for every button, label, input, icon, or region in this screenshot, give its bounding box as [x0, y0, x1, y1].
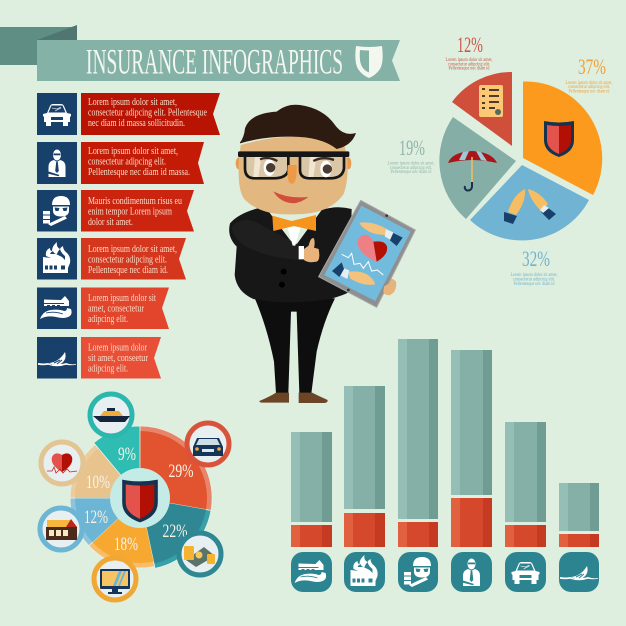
mouth	[273, 191, 308, 203]
bow tie	[272, 215, 316, 231]
label: 32%: Lorem ipsum dolor sit amet,	[510, 273, 558, 278]
ears	[236, 157, 351, 169]
title text: INSURANCE INFOGRAPHICS	[86, 42, 343, 82]
row 3: theft: enim tempor Lorem ipsum	[88, 206, 172, 218]
percent labels: 10%	[86, 472, 110, 493]
row 5: flood	[37, 288, 169, 329]
circle: money	[179, 533, 221, 575]
pie slice: 37% shield	[523, 81, 602, 195]
label: 32%	[510, 246, 558, 287]
pie slice: 12% checklist	[452, 72, 512, 146]
bar: flood	[291, 432, 332, 547]
icon: umbrella	[448, 151, 497, 191]
panel: list of insurance types	[37, 93, 220, 378]
label: 32%: Pellentesque nec diam id	[514, 282, 555, 287]
label: 19%	[388, 135, 434, 175]
label: 19%: 19%	[399, 135, 425, 160]
icon: title shield	[355, 46, 383, 78]
label: 12%: Pellentesque nec diam id	[448, 66, 490, 72]
icon: flood tile	[291, 552, 332, 592]
hand behind tablet	[383, 278, 396, 295]
circle: heart	[41, 442, 83, 484]
label: 37%: Pellentesque nec diam id	[568, 90, 610, 94]
icon: checklist	[479, 85, 503, 117]
circle: monitor	[94, 558, 136, 600]
row 2: injury: consectetur adipcing elit.	[88, 156, 166, 168]
glasses	[238, 151, 349, 178]
row 2: injury: Pellentesque nec diam id massa.	[88, 166, 190, 178]
bar: fire	[344, 386, 385, 547]
arm	[232, 220, 302, 260]
label: 32%: consectetur adipcing elit.	[513, 278, 555, 282]
shirt	[287, 227, 301, 246]
row 1: car: nec diam id massa sollicitudin.	[88, 117, 185, 129]
pie slice: 19% umbrella	[439, 117, 516, 219]
row 3: theft: Mauris condimentum risus eu	[88, 195, 182, 207]
cuff and thumb	[299, 238, 319, 262]
tablet heart	[357, 235, 387, 262]
row 3: theft	[37, 190, 194, 232]
tablet	[319, 200, 415, 307]
percent labels: 12%	[84, 507, 108, 528]
icon: shield	[544, 121, 574, 157]
tablet hand top	[359, 222, 403, 246]
shoes	[259, 393, 328, 403]
percent labels: 18%	[114, 534, 138, 555]
circle: car	[187, 423, 229, 465]
label: 19%: Pellentesque nec diam id	[390, 170, 432, 175]
label: 37%	[566, 54, 612, 94]
bar: car	[505, 422, 546, 547]
row 6: shipwreck: Lorem ipsum dolor	[88, 342, 147, 354]
percent labels: 9%	[118, 444, 136, 465]
row 4: fire: consectetur adipcing elit.	[88, 254, 167, 266]
tablet ecg line	[342, 253, 383, 275]
row 6: shipwreck	[37, 337, 161, 378]
label: 12%: Lorem ipsum dolor sit amet,	[446, 58, 492, 63]
icon: car tile	[505, 552, 546, 592]
bar: injury	[451, 350, 492, 547]
percent labels: 22%	[162, 521, 188, 542]
bar: shipwreck	[559, 483, 599, 547]
segment: 12% house	[70, 498, 140, 546]
segment: 10% heart	[70, 444, 140, 498]
fingers on tablet	[383, 284, 395, 295]
row 2: injury	[37, 142, 204, 184]
icon: hands	[504, 189, 556, 224]
label: 12%: consectetur adipcing elit.	[448, 62, 490, 68]
row 4: fire	[37, 238, 186, 280]
donut chart	[40, 394, 229, 600]
title ribbon	[0, 25, 400, 82]
label: 19%: Lorem ipsum dolor sit amet,	[388, 162, 434, 166]
row 1: car	[37, 93, 220, 135]
bar: theft	[398, 339, 438, 547]
percent labels	[84, 444, 194, 555]
label: 37%: 37%	[578, 54, 606, 79]
label: 32%: 32%	[522, 246, 550, 271]
row 1: car: consectetur adipcing elit. Pellentesque	[88, 106, 207, 118]
row 5: flood: adipcing elit.	[88, 313, 128, 325]
bar chart	[291, 339, 599, 592]
jacket	[229, 207, 352, 302]
label: 37%: Lorem ipsum dolor sit amet,	[566, 81, 612, 86]
row 6: shipwreck: sit amet, conseetur	[88, 352, 148, 364]
legs	[253, 295, 335, 393]
nose	[287, 165, 297, 184]
icon: theft tile	[398, 552, 438, 592]
row 5: flood: Lorem ipsum dolor sit	[88, 292, 156, 304]
row 6: shipwreck: adipcing elit.	[88, 362, 128, 374]
segment: 29% car	[140, 426, 212, 510]
row 2: injury: Lorem ipsum dolor sit amet,	[88, 145, 178, 157]
row 5: flood: amet, consectetur	[88, 302, 144, 314]
center circle with shield	[110, 468, 170, 528]
label: 37%: consectetur adipcing elit.	[568, 85, 610, 90]
label: 19%: consectetur adipcing elit.	[390, 166, 432, 171]
character: businessman with tablet	[229, 105, 415, 403]
row 3: theft: dolor sit amet.	[88, 216, 133, 228]
circle: ship	[90, 394, 132, 436]
pie chart	[388, 32, 612, 287]
tablet hand bottom	[332, 262, 375, 285]
percent labels: 29%	[168, 461, 194, 482]
segment: 18% monitor	[89, 498, 155, 568]
label: 12%: 12%	[457, 32, 483, 57]
face	[239, 137, 348, 214]
jacket buttons	[279, 269, 287, 288]
circle: house	[40, 508, 82, 550]
row 4: fire: Lorem ipsum dolor sit amet,	[88, 243, 177, 255]
segment: 9% ship	[94, 426, 140, 498]
row 1: car: Lorem ipsum dolor sit amet,	[88, 96, 177, 108]
row 4: fire: Pellentesque nec diam id.	[88, 264, 168, 276]
pie slice: 32% hands	[470, 165, 589, 240]
icon: fire tile	[344, 552, 385, 592]
icon: shipwreck tile	[559, 552, 599, 592]
label: 12%	[446, 32, 492, 72]
segment: 22% money	[140, 498, 211, 568]
icon: injury tile	[451, 552, 492, 592]
hair	[240, 105, 356, 149]
